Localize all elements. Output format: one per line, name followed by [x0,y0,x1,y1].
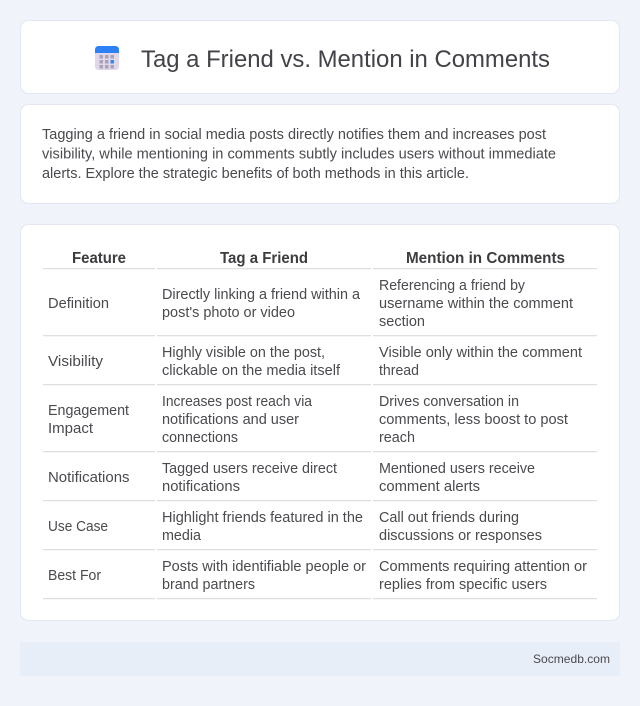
row: Engagement Impact: Increases post reach via [162,394,312,410]
row: Notifications [48,461,535,495]
icon: calendar [95,46,119,70]
row: Use Case: Use Case [48,519,108,535]
row: Definition [48,278,573,330]
row: Notifications: notifications [162,479,240,495]
row: Visibility: Visible only within the comment [379,345,582,361]
panel: comparison table card [20,224,620,620]
row: Engagement Impact: Engagement [48,403,129,419]
row: Definition: Definition [48,296,109,312]
row: Best For [48,559,587,593]
panel: intro text card [20,104,620,204]
row: Engagement Impact: Impact [48,421,93,437]
row: Engagement Impact [48,394,568,446]
row: Use Case: Highlight friends featured in the [162,510,363,526]
row: Notifications: Tagged users receive direct [162,461,337,477]
row: Use Case: discussions or responses [379,528,542,544]
row: Engagement Impact: notifications and user [162,412,299,428]
row: Definition: Directly linking a friend within a [162,287,360,303]
row: Visibility: Highly visible on the post, [162,345,325,361]
intro paragraph: visibility, while mentioning in comments subtly includes users without immediate [42,146,556,162]
row: Engagement Impact: Drives conversation in [379,394,519,410]
panel: title card [20,20,620,94]
row: Best For: Posts with identifiable people or [162,559,366,575]
row: Engagement Impact: comments, less boost to post [379,412,568,428]
row: Use Case: media [162,528,201,544]
row: Definition: username within the comment [379,296,573,312]
table header [72,250,565,267]
title: Tag a Friend vs. Mention in Comments [141,46,550,73]
row: Definition: section [379,314,425,330]
intro paragraph: Tagging a friend in social media posts directly notifies them and increases post [42,127,546,143]
intro paragraph [42,127,556,182]
intro paragraph: alerts. Explore the strategic benefits of both methods in this article. [42,166,469,182]
row: Visibility: Visibility [48,354,104,370]
row: Best For: replies from specific users [379,577,547,593]
table header: Mention in Comments [406,250,565,267]
row: Use Case [48,510,542,544]
row: Definition: post's photo or video [162,305,295,321]
row: Definition: Referencing a friend by [379,278,526,294]
footer bar [20,642,620,676]
footer credit: Socmedb.com [533,652,610,666]
row: Visibility [48,345,582,379]
row: Engagement Impact: connections [162,430,238,446]
row: Visibility: thread [379,363,419,379]
row: Notifications: Mentioned users receive [379,461,535,477]
row: Engagement Impact: reach [379,430,415,446]
table header: Tag a Friend [220,250,308,267]
row: Visibility: clickable on the media itself [162,363,341,379]
row: Best For: Comments requiring attention or [379,559,587,575]
table header: Feature [72,250,126,267]
row: Notifications: comment alerts [379,479,480,495]
row: Use Case: Call out friends during [379,510,519,526]
row: Best For: brand partners [162,577,255,593]
row: Best For: Best For [48,568,101,584]
row: Notifications: Notifications [48,470,130,486]
